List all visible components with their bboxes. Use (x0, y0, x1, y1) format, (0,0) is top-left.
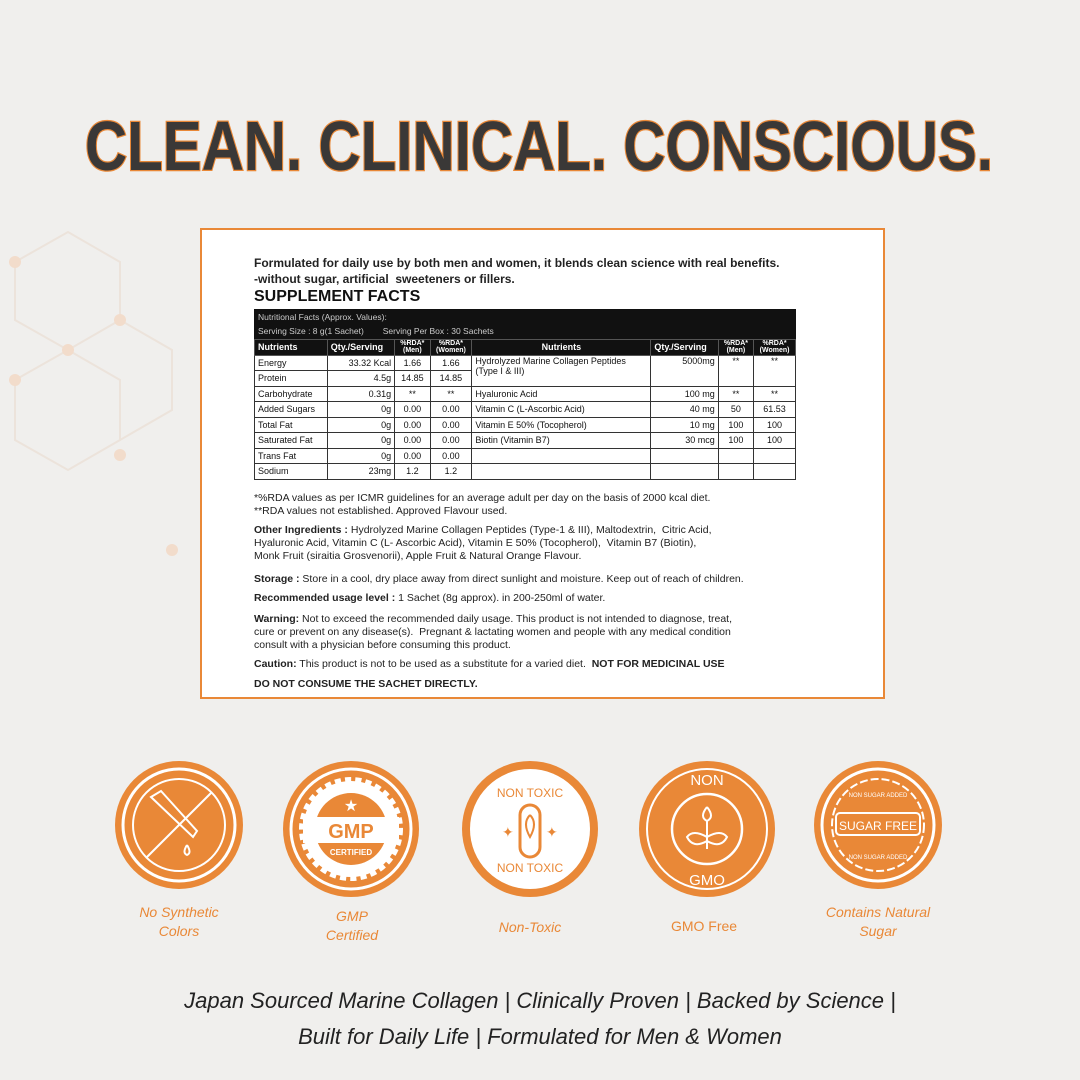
nutrition table: 0g (381, 404, 391, 414)
nutrition table: Serving Size : 8 g(1 Sachet) Serving Per Box : 30 Sachets (258, 326, 494, 336)
nutrition table: 10 mg (690, 420, 715, 430)
icon: sugar free (814, 761, 942, 889)
label: natural sugar (826, 904, 930, 939)
other ingredients (254, 524, 712, 562)
nutrition table: Trans Fat (258, 451, 296, 461)
nutrition table: 0.00 (404, 435, 421, 445)
nutrition table: ** (771, 389, 778, 399)
storage: Storage : Store in a cool, dry place away from direct sunlight and moisture. Keep out of reach of children. (254, 573, 744, 585)
nutrition table: 23mg (369, 466, 391, 476)
nutrition table: 40 mg (690, 404, 715, 414)
nutrition table: Total Fat (258, 420, 293, 430)
warning (254, 613, 732, 651)
other ingredients: Hyaluronic Acid, Vitamin C (L- Ascorbic Acid), Vitamin E 50% (Tocopherol), Vitamin B7 (Biotin), (254, 537, 696, 549)
nutrition table: Biotin (Vitamin B7) (475, 435, 550, 445)
nutrition table: (Type I & III) (475, 366, 524, 376)
intro text: -without sugar, artificial sweeteners or fillers. (254, 272, 515, 286)
nutrition table: (Women) (436, 347, 466, 354)
intro text: Formulated for daily use by both men and women, it blends clean science with real benefits. (254, 256, 779, 270)
nutrition table: (Women) (760, 347, 789, 354)
nutrition table: Added Sugars (258, 404, 315, 414)
nutrition table: %RDA* (400, 340, 424, 347)
nutrition table: 100 mg (685, 389, 715, 399)
icon: GMP certified: CERTIFIED (330, 848, 372, 857)
label: no synthetic colors: Colors (159, 923, 199, 939)
icon: GMP certified: GMP (328, 821, 374, 843)
text: Built for Daily Life | Formulated for Men & Women (298, 1024, 782, 1049)
nutrition table: ** (409, 389, 416, 399)
warning: consult with a physician before consuming this product. (254, 639, 511, 651)
nutrition table: 0.00 (442, 435, 460, 445)
label: non-toxic: Non-Toxic (499, 919, 561, 935)
nutrition table: 0.00 (404, 420, 421, 430)
icon: non GMO: GMO (689, 872, 725, 889)
nutrition table: Qty./Serving (654, 342, 707, 352)
nutrition table: 0.00 (442, 404, 460, 414)
panel: supplement facts: DO NOT CONSUME THE SACHET DIRECTLY. (254, 678, 478, 690)
nutrition table: 1.2 (445, 466, 457, 476)
icon: GMP certified (283, 761, 419, 897)
nutrition table: 100 (728, 435, 743, 445)
icon: GMP certified: ★ (344, 798, 358, 815)
label: GMO free: GMO Free (671, 918, 737, 934)
nutrition table: 1.66 (404, 358, 421, 368)
icon: sugar free: SUGAR FREE (839, 819, 917, 833)
icon: non toxic: NON TOXIC (497, 861, 563, 875)
nutrition table: 0.00 (404, 404, 421, 414)
footnotes (254, 492, 710, 517)
nutrition table: %RDA* (762, 340, 787, 347)
nutrition table: %RDA* (724, 340, 748, 347)
nutrition table: 4.5g (374, 373, 391, 383)
other ingredients: Monk Fruit (siraitia Grosvenorii), Apple Fruit & Natural Orange Flavour. (254, 550, 581, 562)
nutrition table: 0g (381, 435, 391, 445)
panel: supplement facts (200, 228, 885, 699)
nutrition table: 100 (728, 420, 743, 430)
nutrition table: (Men) (403, 347, 422, 354)
label: no synthetic colors (139, 904, 219, 939)
nutrition table: 30 mcg (685, 435, 715, 445)
icon: non toxic: NON TOXIC (497, 786, 563, 800)
warning: cure or prevent on any disease(s). Pregnant & lactating women and people with any medical condition (254, 626, 731, 638)
nutrition table: ** (771, 356, 778, 366)
label: GMP certified (326, 908, 378, 943)
nutrition table: Nutrients (258, 342, 298, 352)
usage: Recommended usage level : 1 Sachet (8g approx). in 200-250ml of water. (254, 592, 605, 604)
nutrition table: (Men) (727, 347, 745, 354)
nutrition table: Carbohydrate (258, 389, 313, 399)
nutrition table: 14.85 (440, 373, 462, 383)
nutrition table: Hydrolyzed Marine Collagen Peptides (475, 356, 626, 366)
nutrition table: 100 (767, 420, 782, 430)
nutrition table: Protein (258, 373, 287, 383)
label: GMP certified: Certified (326, 927, 378, 943)
footnotes: **RDA values not established. Approved Flavour used. (254, 505, 507, 517)
label: GMP certified: GMP (336, 908, 368, 924)
icon: sugar free: NON SUGAR ADDED (849, 855, 908, 861)
nutrition table: Saturated Fat (258, 435, 313, 445)
warning: Warning: Not to exceed the recommended daily usage. This product is not intended to diagnose, treat, (254, 613, 732, 625)
nutrition table: Vitamin C (L-Ascorbic Acid) (475, 404, 585, 414)
heading: supplement facts: SUPPLEMENT FACTS (254, 288, 420, 305)
footnotes: *%RDA values as per ICMR guidelines for an average adult per day on the basis of 2000 kcal diet. (254, 492, 710, 504)
icon: non toxic: ✦ (546, 824, 558, 840)
background hex pattern (9, 231, 178, 556)
nutrition table: 0.00 (442, 420, 460, 430)
badges row (115, 761, 942, 897)
icon: non GMO (639, 761, 775, 897)
nutrition table: Energy (258, 358, 287, 368)
nutrition table: Vitamin E 50% (Tocopherol) (475, 420, 587, 430)
nutrition table: ** (732, 356, 739, 366)
nutrition table (254, 309, 796, 480)
icon: non GMO: NON (690, 772, 724, 789)
icon: sugar free: NON SUGAR ADDED (849, 793, 908, 799)
tagline: Japan Sourced Marine Collagen | Clinically Proven | Backed by Science | (184, 988, 896, 1013)
caution: Caution: This product is not to be used as a substitute for a varied diet. NOT FOR MEDICINAL USE (254, 658, 725, 670)
nutrition table: 0.31g (369, 389, 391, 399)
icon: non toxic (462, 761, 598, 897)
nutrition table: 0.00 (442, 451, 460, 461)
label: natural sugar: Contains Natural (826, 904, 930, 920)
nutrition table: 61.53 (763, 404, 786, 414)
nutrition table: 14.85 (401, 373, 424, 383)
nutrition table: 1.2 (406, 466, 419, 476)
nutrition table: 0.00 (404, 451, 421, 461)
label: natural sugar: Sugar (859, 923, 897, 939)
nutrition table: Sodium (258, 466, 289, 476)
icon: non toxic: ✦ (502, 824, 514, 840)
nutrition table: 0g (381, 420, 391, 430)
nutrition table: 5000mg (682, 356, 715, 366)
nutrition table: 33.32 Kcal (349, 358, 391, 368)
label: no synthetic colors: No Synthetic (139, 904, 219, 920)
nutrition table: Hyaluronic Acid (475, 389, 537, 399)
nutrition table: 100 (767, 435, 782, 445)
nutrition table: ** (732, 389, 739, 399)
icon: no synthetic colors (115, 761, 243, 889)
nutrition table: ** (447, 389, 454, 399)
other ingredients: Other Ingredients : Hydrolyzed Marine Collagen Peptides (Type-1 & III), Maltodextrin, Citric Acid, (254, 524, 712, 536)
nutrition table: Nutritional Facts (Approx. Values): (258, 312, 387, 322)
nutrition table: %RDA* (439, 340, 463, 347)
nutrition table: Nutrients (542, 342, 581, 352)
nutrition table: 0g (381, 451, 391, 461)
nutrition table: 50 (731, 404, 741, 414)
nutrition table: Qty./Serving (331, 342, 383, 352)
intro text (254, 256, 779, 286)
nutrition table: 1.66 (442, 358, 460, 368)
